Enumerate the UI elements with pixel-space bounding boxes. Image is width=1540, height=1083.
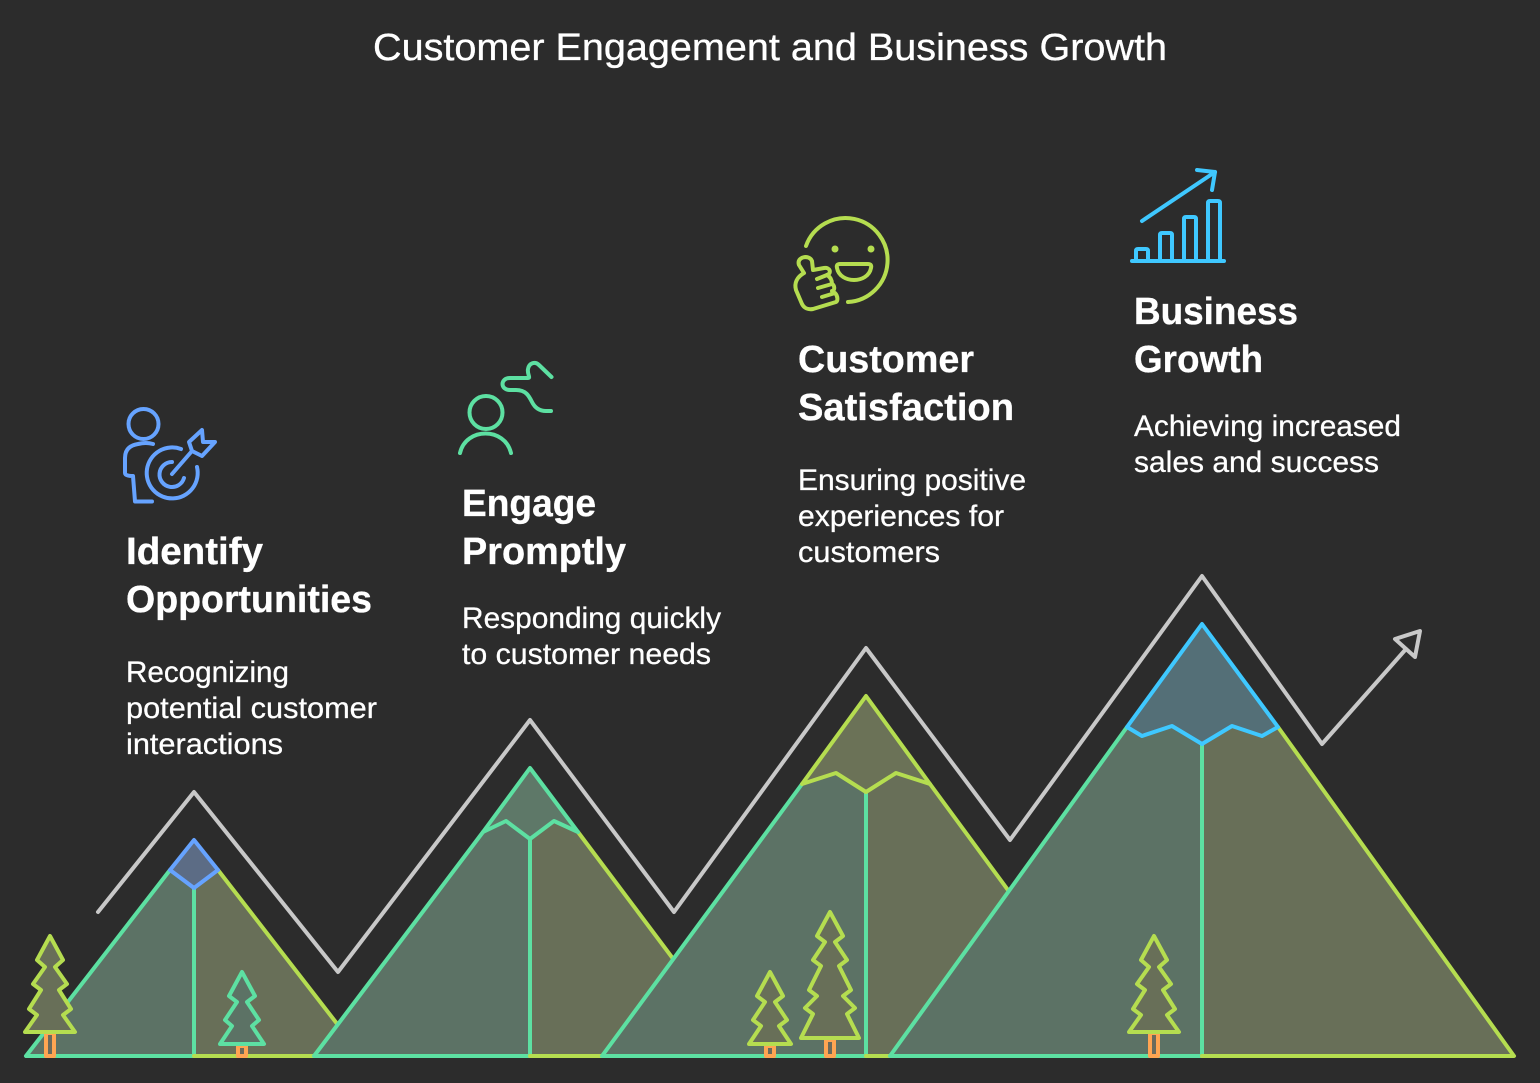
description: customers: [798, 536, 940, 569]
mountain 2: [314, 768, 746, 1056]
title: Customer Engagement and Business Growth: [373, 27, 1167, 69]
panel: engage promptly: [460, 363, 721, 671]
description: Ensuring positive: [798, 464, 1026, 497]
description: potential customer: [126, 692, 377, 725]
mountain 4: [890, 624, 1514, 1056]
tree 1: [25, 936, 75, 1056]
heading: [1134, 291, 1298, 381]
tree 4: [801, 912, 859, 1056]
panel: mountains: [25, 576, 1514, 1056]
description: Responding quickly: [462, 602, 721, 635]
description: Recognizing: [126, 656, 289, 689]
heading: Growth: [1134, 339, 1263, 381]
heading: Engage: [462, 483, 596, 525]
description: [798, 464, 1026, 569]
description: [126, 656, 377, 761]
description: experiences for: [798, 500, 1004, 533]
growth arrow line: [98, 576, 1420, 972]
icon: person with squiggle: [460, 363, 552, 453]
description: interactions: [126, 728, 283, 761]
description: [462, 602, 721, 671]
heading: [798, 339, 1014, 429]
tree 3: [749, 972, 791, 1056]
panel: business growth: [1132, 170, 1401, 479]
description: [1134, 410, 1401, 479]
icon: smiley with thumbs up: [795, 218, 888, 309]
description: Achieving increased: [1134, 410, 1401, 443]
panel: identify opportunities: [125, 409, 377, 761]
heading: Customer: [798, 339, 974, 381]
heading: [126, 531, 372, 621]
heading: [462, 483, 626, 573]
mountain 3: [602, 696, 1130, 1056]
panel: customer satisfaction: [795, 218, 1026, 569]
icon: rising bar chart: [1132, 170, 1224, 261]
description: sales and success: [1134, 446, 1379, 479]
heading: Business: [1134, 291, 1298, 333]
icon: person with target: [125, 409, 215, 502]
tree 5: [1129, 936, 1179, 1056]
mountain 1: [26, 840, 362, 1056]
heading: Opportunities: [126, 579, 372, 621]
heading: Satisfaction: [798, 387, 1014, 429]
heading: Promptly: [462, 531, 626, 573]
tree 2: [220, 972, 264, 1056]
description: to customer needs: [462, 638, 711, 671]
heading: Identify: [126, 531, 263, 573]
